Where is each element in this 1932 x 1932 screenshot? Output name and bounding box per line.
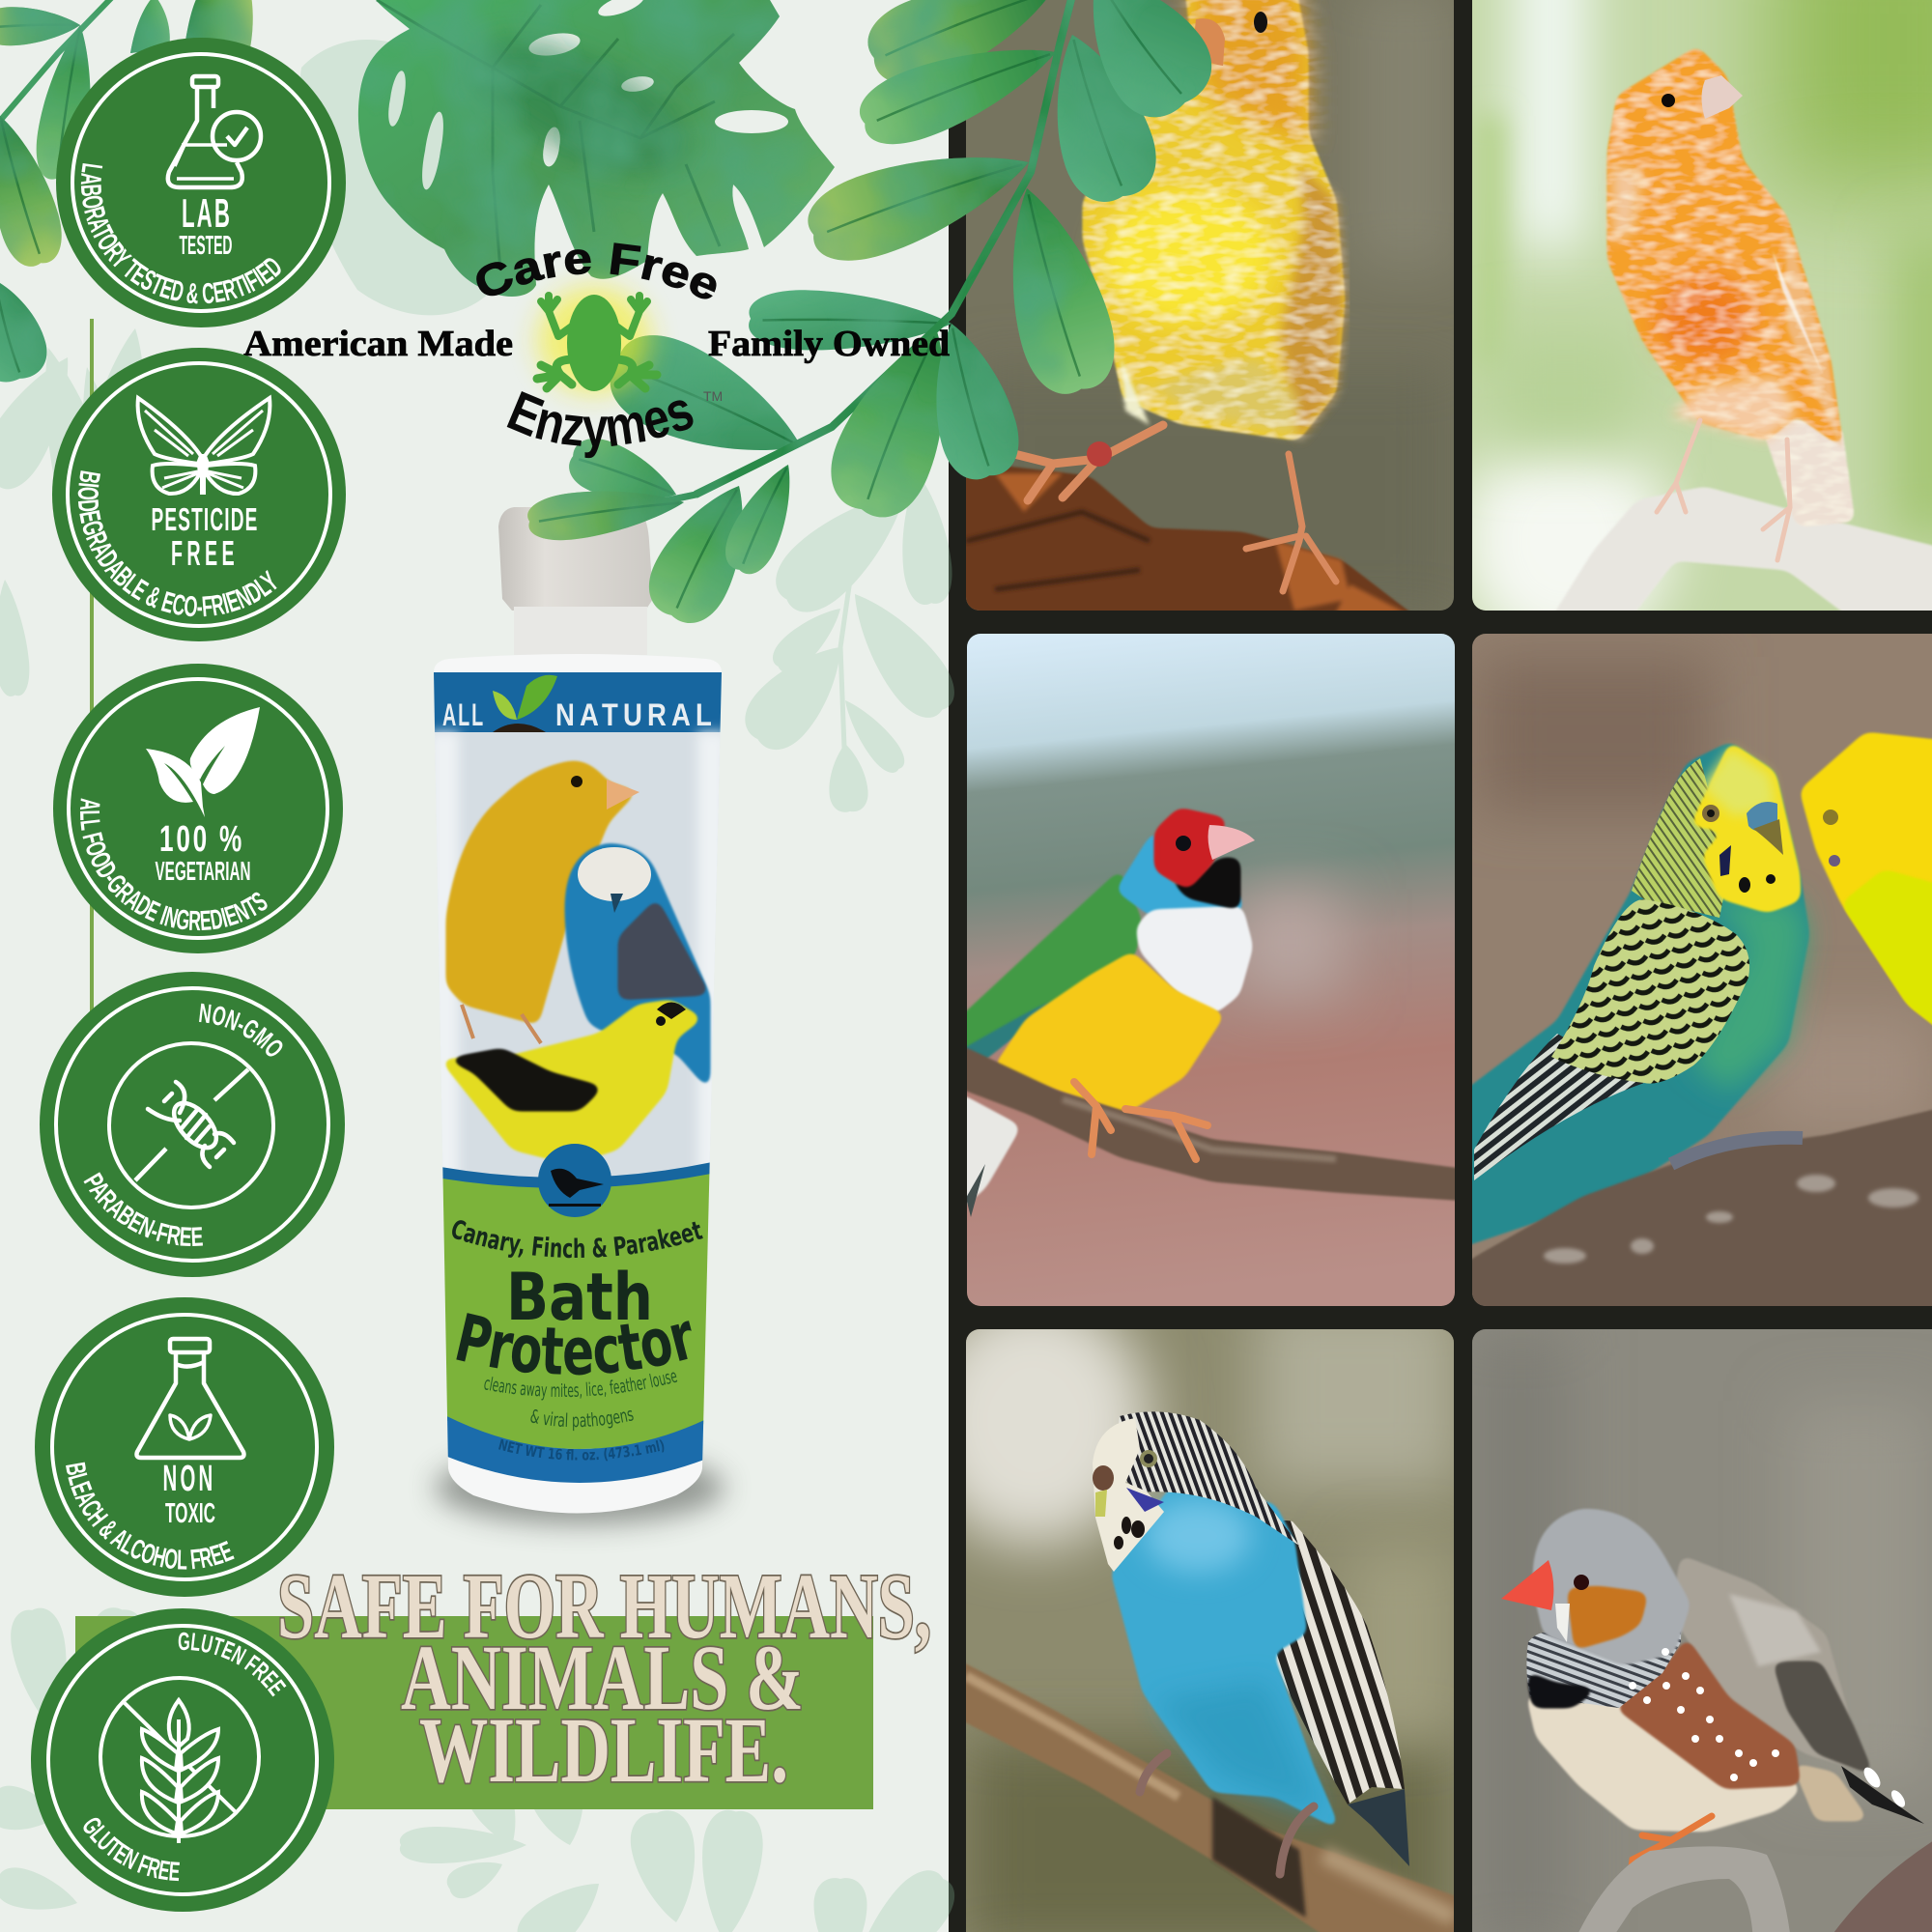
badge: lab tested (56, 38, 346, 327)
monstera leaf (358, 0, 835, 297)
watercolor foliage (0, 0, 1228, 529)
badge: gluten free: GLUTEN FREE (178, 1627, 292, 1701)
second yellow budgerigar (1800, 732, 1932, 1053)
badge: non toxic: NON (162, 1459, 216, 1499)
icon: flask with leaf (137, 1339, 243, 1458)
yellow canary on label (446, 761, 639, 1043)
photo: yellow canary on rock (956, 0, 1459, 638)
leaf sprig: top right over canary (696, 0, 1228, 529)
badge: lab tested: LAB (182, 190, 232, 236)
branch (956, 1043, 1468, 1201)
badge: non-GMO paraben-free: NON-GMO (197, 998, 290, 1064)
headline: safe for humans, animals & wildlife: SAFE FOR HUMANS, (277, 1554, 931, 1658)
photo: orange canary on pale branch (1459, 0, 1932, 657)
blue budgerigar on label (565, 843, 710, 1092)
badge: 100% vegetarian: 100 % (159, 819, 244, 860)
headline: safe for humans, animals & wildlife: ANIMALS & (401, 1626, 804, 1729)
badge: pesticide free: BIODEGRADABLE & ECO-FRIENDLY (77, 470, 277, 616)
badge: 100% vegetarian (53, 664, 343, 953)
bottle body (434, 654, 722, 1513)
bottle label text: NET WT 16 fl. oz. (473.1 ml) (498, 1439, 665, 1461)
legs and feet (1014, 425, 1336, 591)
care free arc text: Care Free (476, 242, 717, 299)
bottle label text (447, 1214, 706, 1464)
bottle label text: Bath (506, 1260, 653, 1336)
green banner (75, 1616, 873, 1809)
trademark: TM (703, 388, 723, 404)
all natural band text: ALL (442, 697, 485, 732)
enzymes arc text: Enzymes (506, 391, 694, 458)
bottle label text: & viral pathogens (530, 1409, 634, 1432)
badge: non toxic (35, 1297, 334, 1597)
rock (966, 466, 1409, 611)
badge: non-GMO paraben-free (40, 972, 345, 1277)
sprout icon (493, 675, 557, 732)
badge: pesticide free: FREE (171, 533, 239, 573)
product bottle: NATURAL (555, 697, 717, 732)
photo: blue budgerigar on branch (966, 1329, 1454, 1932)
product bottle (421, 507, 738, 1542)
icon: wheat (142, 1700, 218, 1843)
bottle label text: cleans away mites, lice, feather louse (484, 1372, 678, 1401)
label art (430, 732, 729, 1186)
badge: non-GMO paraben-free: PARABEN-FREE (78, 1168, 204, 1252)
icon: flask with check (168, 76, 261, 187)
badge: non toxic: TOXIC (165, 1498, 215, 1529)
bottle label text: Protector (456, 1313, 692, 1376)
badge: 100% vegetarian: VEGETARIAN (155, 856, 251, 886)
badge: 100% vegetarian: ALL FOOD-GRADE INGREDIENTS (73, 797, 273, 937)
rock (1472, 1109, 1932, 1306)
photo: gouldian finch on branch (956, 634, 1468, 1306)
leaves over bottle cap (526, 427, 832, 635)
bottle cap (498, 507, 653, 611)
badge: lab tested: LABORATORY TESTED & CERTIFIED (81, 163, 281, 303)
badge: lab tested: TESTED (180, 230, 232, 260)
feet (1074, 1082, 1208, 1159)
badge: gluten free: GLUTEN FREE (76, 1811, 181, 1887)
family owned: Family Owned (708, 324, 950, 364)
photo: green budgerigars on rock (1454, 634, 1932, 1328)
badge: pesticide free (52, 348, 346, 641)
bottle label text: Canary, Finch & Parakeet (452, 1220, 703, 1258)
branch (952, 1657, 1468, 1932)
badge: non toxic: BLEACH & ALCOHOL FREE (59, 1461, 238, 1577)
frog with glow (537, 287, 657, 393)
badge: gluten free (31, 1608, 334, 1912)
headline: safe for humans, animals & wildlife: WILDLIFE. (419, 1698, 788, 1802)
pale branch (1556, 487, 1932, 611)
badge: pesticide free: PESTICIDE (151, 501, 259, 537)
icon: two leaves (146, 707, 260, 817)
photo: zebra finch on perch (1472, 1329, 1932, 1932)
goldfinch on label (440, 1000, 703, 1164)
vertical green line (90, 319, 94, 1014)
perch (1570, 1846, 1792, 1932)
icon: DNA helix (148, 1082, 234, 1167)
leaf behind logo (598, 320, 820, 488)
icon: butterfly (138, 398, 270, 495)
bird circle badge (538, 1144, 611, 1217)
pale background foliage (0, 40, 966, 1932)
brand logo (243, 233, 950, 459)
american made: American Made (243, 324, 513, 364)
left panel background (0, 0, 949, 1932)
headline: safe for humans, animals & wildlife (277, 1554, 931, 1802)
leaf: top-left cluster (0, 0, 253, 387)
